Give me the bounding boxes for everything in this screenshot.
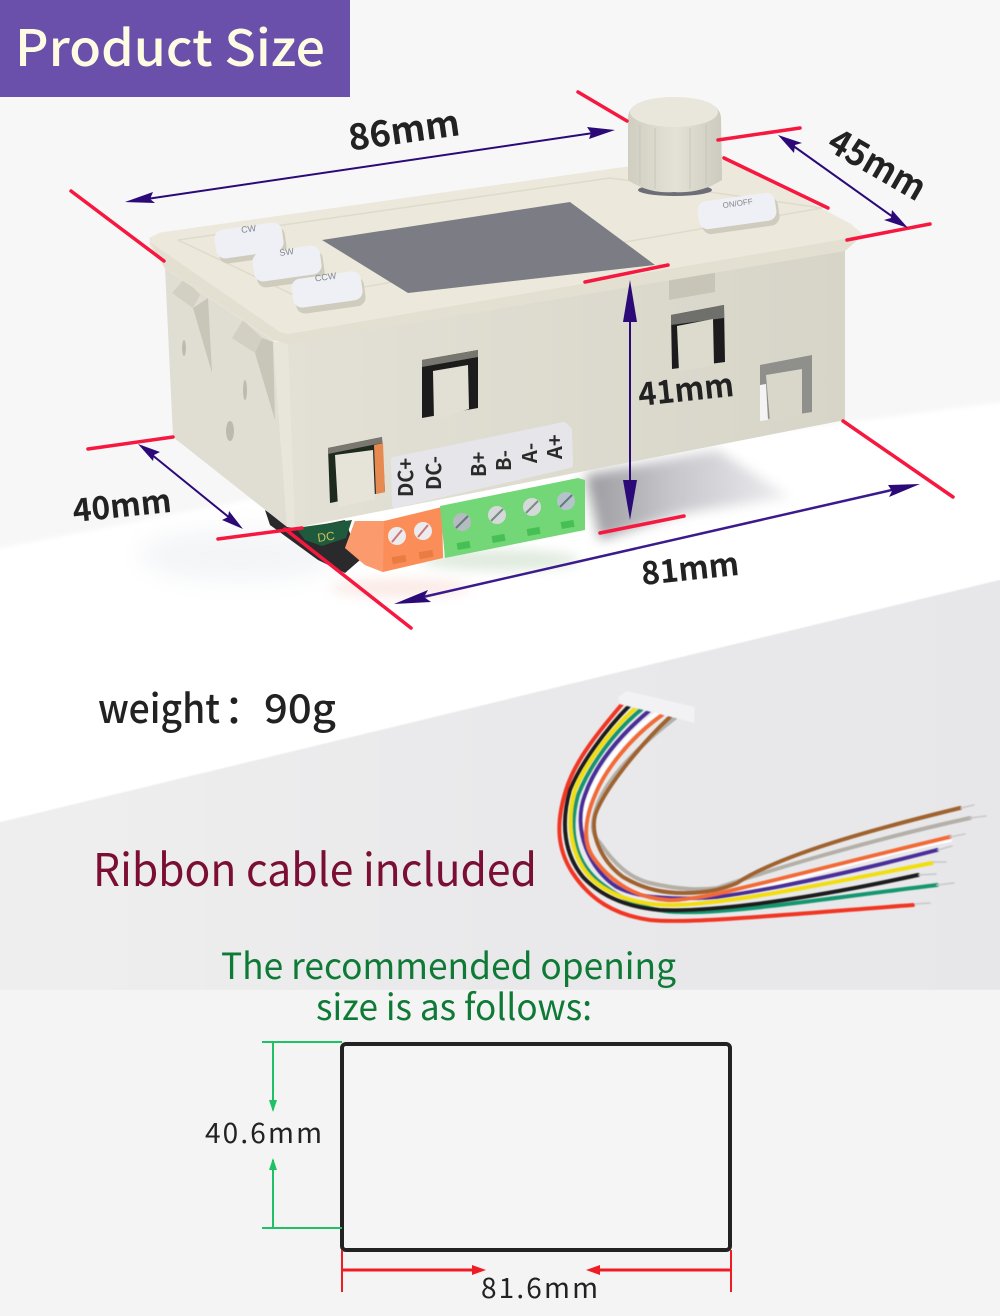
terminal label: B+ (463, 451, 492, 477)
buttons (213, 192, 781, 315)
white wire (583, 713, 950, 900)
button ON/OFF: ON/OFF (722, 197, 753, 210)
gray wire (593, 718, 970, 889)
centre slot (422, 350, 478, 418)
recess (669, 268, 715, 300)
weight text: weight (98, 677, 220, 735)
front slot clips (328, 268, 812, 507)
opening size heading: The recommended opening (221, 938, 676, 990)
capacitor under board (265, 510, 360, 573)
height dimension (205, 1042, 342, 1228)
title banner: Product Size (15, 9, 325, 81)
weight text (98, 677, 336, 735)
shadows under module (140, 450, 790, 597)
brown wire (594, 717, 960, 893)
terminal label: A+ (539, 434, 568, 460)
dimension 81mm (394, 484, 920, 604)
orange wire (586, 715, 950, 900)
orange terminal block (345, 507, 443, 572)
dimension 41mm (623, 280, 736, 520)
display screen (322, 202, 655, 293)
button CW: CW (240, 223, 257, 235)
black wire (565, 705, 918, 910)
button CCW: CCW (314, 271, 337, 283)
opening size heading: size is as follows: (316, 979, 592, 1031)
button CCW (290, 270, 367, 315)
far right slot (760, 355, 812, 420)
terminal label: DC+ (390, 458, 419, 497)
corner strip (273, 342, 295, 528)
terminal label: A- (514, 443, 543, 464)
weight text: 90g (264, 677, 336, 735)
green terminal block (440, 478, 585, 558)
height dimension: 40.6mm (205, 1112, 322, 1152)
ribbon cable caption: Ribbon cable included (93, 834, 537, 899)
capacitor under board: DC (316, 529, 336, 545)
side latches (172, 278, 275, 441)
terminal label: B- (488, 450, 517, 471)
top plate (150, 156, 862, 344)
terminal label: DC- (418, 456, 447, 490)
yellow wire (571, 707, 932, 905)
weight text: ： (224, 677, 264, 735)
dimension 41mm: 41mm (636, 360, 736, 416)
opening rectangle (342, 1044, 730, 1250)
title banner (0, 0, 350, 97)
green wire (574, 708, 937, 912)
left side face (165, 268, 296, 528)
button SW (251, 244, 326, 289)
width dimension (342, 1250, 731, 1307)
left slot (328, 437, 385, 503)
dimension 40mm: 40mm (70, 476, 173, 532)
dimension 45mm (778, 113, 937, 228)
button ON/OFF (696, 192, 781, 235)
connector (618, 691, 695, 723)
product photo: power module (140, 97, 862, 597)
red wire (559, 703, 913, 921)
right slot (671, 305, 725, 369)
dimension 86mm (125, 94, 615, 203)
terminal label (390, 425, 570, 505)
rotary knob (628, 97, 722, 196)
wire tips (915, 805, 986, 904)
button CW (213, 221, 288, 265)
ribbon cable photo (559, 691, 986, 921)
dimension 45mm: 45mm (820, 113, 937, 211)
red extension lines (71, 92, 953, 628)
dimension 86mm: 86mm (345, 94, 463, 162)
opening size heading (221, 938, 676, 1031)
blue wire (581, 710, 937, 898)
button SW: SW (279, 246, 295, 258)
dimension 40mm (70, 444, 243, 532)
opening size diagram (205, 1042, 731, 1307)
front face (288, 250, 845, 528)
width dimension: 81.6mm (481, 1267, 598, 1307)
dimension 81mm: 81mm (639, 539, 741, 595)
